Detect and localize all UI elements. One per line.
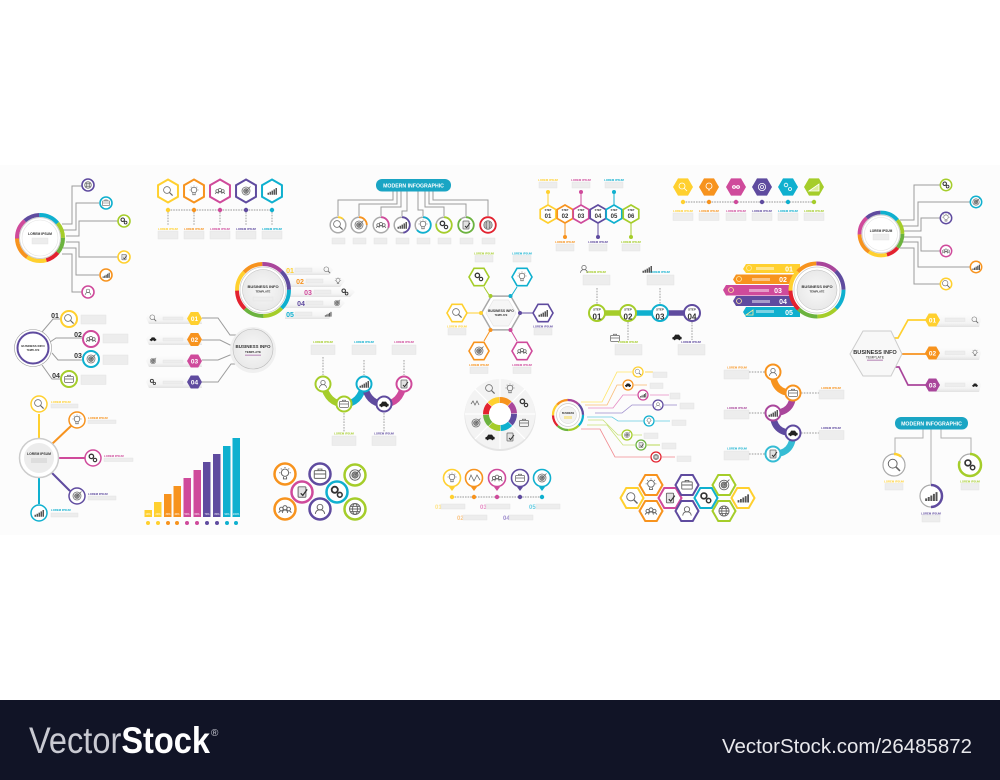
panel: business info circle with arrow tags 01-05: 05 [286,312,294,319]
panel: pin timeline five steps: 05 [529,505,536,511]
panel: business info circle with arrow tags 01-05: 02 [296,279,304,286]
panel: business info tags with hexagon numbers: 04 [191,380,198,386]
ring: business info [237,264,289,316]
panel: wave chain five nodes [311,340,416,446]
ring: lorem ipsum: LOREM IPSUM [28,232,52,236]
panel: numbered 01-04 circle left [14,311,128,387]
panel: business info tags with hexagon numbers [146,312,276,388]
panel: wave chain five nodes: LOREM IPSUM [313,340,334,344]
panel: business info circle with arrow tags 01-05: 04 [297,301,305,308]
hub circle: BUSINESS [562,412,575,415]
panel: outlined hexagon timeline: LOREM IPSUM [210,227,231,231]
panel: vertical S chain: LOREM IPSUM [727,446,748,450]
panel: step chain 01-04: STEP [656,308,664,312]
panel: filled hexagon timeline: LOREM IPSUM [699,209,720,213]
panel: radial lorem ipsum top right [860,179,982,290]
panel: hexagon radial business info: LOREM IPSUM [512,252,533,256]
panel: coloured arrow bars 01-05 with circle: 03 [774,288,782,295]
circle: business info [230,327,276,373]
panel: outlined hexagon timeline: LOREM IPSUM [184,227,205,231]
panel: hexagon steps 01-06: LOREM IPSUM [588,240,609,244]
panel: hexagon radial business info [447,252,554,374]
panel: filled hexagon timeline: LOREM IPSUM [804,209,825,213]
ring: business info: BUSINESS INFO [247,284,279,289]
panel: outlined hexagon timeline: LOREM IPSUM [158,227,179,231]
branch nodes right [940,179,982,290]
panel: step chain 01-04: LOREM IPSUM [650,270,671,274]
panel: hexagon business info with tags 01-03 right: 02 [929,350,936,358]
panel: hexagon radial business info: LOREM IPSUM [447,324,468,328]
panel: step chain 01-04: 01 [593,312,602,322]
hub circle: LOREM IPSUM [27,452,51,456]
panel: step chain 01-04: STEP [624,308,632,312]
central flat hexagon: TEMPLATE [866,356,885,360]
footer band [0,700,1000,780]
panel: modern infographic org chart [330,179,496,244]
panel: coloured arrow bars 01-05 with circle [723,262,845,318]
ring: business info small: TEMPLATE [27,349,40,352]
panel: step chain 01-04: LOREM IPSUM [681,340,702,344]
heading pill [376,179,451,192]
panel: hexagon steps 01-06: STEP [562,208,569,212]
circle: business info: BUSINESS INFO [235,344,271,349]
panel: branching circuit lines [553,367,694,462]
panel: step chain 01-04: 02 [624,312,633,322]
panel: wave chain five nodes: LOREM IPSUM [374,432,395,436]
panel: numbered 01-04 circle left: 03 [74,353,82,360]
panel: hexagon radial business info: LOREM IPSUM [469,363,490,367]
panel: step chain 01-04: LOREM IPSUM [586,270,607,274]
panel: radial five spokes lower left [20,396,133,521]
panel: modern infographic three circles: LOREM IPSUM [884,480,905,484]
panel: hexagon steps 01-06: STEP [578,208,585,212]
bar chart: 30% [165,513,171,516]
panel: business info circle with arrow tags 01-05: 01 [286,268,294,275]
panel: hexagon steps 01-06: STEP [545,208,552,212]
panel: coloured arrow bars 01-05 with circle: 04 [779,299,787,306]
panel: coloured arrow bars 01-05 with circle: 01 [785,266,793,274]
panel: hexagon steps 01-06: STEP [611,208,618,212]
panel: wave chain five nodes: LOREM IPSUM [354,340,375,344]
panel: business info tags with hexagon numbers: 01 [191,316,198,323]
circle: business info: TEMPLATE [245,350,261,354]
panel: vertical S chain: LOREM IPSUM [727,406,748,410]
panel: business info circle with arrow tags 01-05 [237,264,355,319]
panel: outlined hexagon timeline: LOREM IPSUM [236,227,257,231]
panel: radial five spokes lower left: LOREM IPSUM [51,508,71,512]
panel: filled hexagon timeline: LOREM IPSUM [673,209,694,213]
panel: hexagon steps 01-06: LOREM IPSUM [538,178,559,182]
panel: step chain 01-04: STEP [688,308,696,312]
panel: step chain 01-04 [580,265,705,355]
bar chart: 80% [214,513,220,516]
ring: business info: TEMPLATE [256,290,271,294]
central flat hexagon: BUSINESS INFO [853,350,897,356]
panel: vertical S chain: LOREM IPSUM [727,366,748,370]
panel: radial five spokes lower left: LOREM IPSUM [51,400,71,404]
panel: pin timeline five steps: 01 [435,505,442,511]
ring: business info right [789,262,845,318]
panel: radial five spokes lower left: LOREM IPSUM [104,454,124,458]
panel: hexagon business info with tags 01-03 right: 01 [929,318,936,324]
panel: hexagon business info with tags 01-03 right [850,314,981,392]
central hexagon: TEMPLATE [495,314,508,317]
ring: business info right: TEMPLATE [810,290,825,294]
panel: hexagon steps 01-06: 02 [562,214,569,220]
panel: hexagon steps 01-06: LOREM IPSUM [604,178,625,182]
bar chart: 10% [145,513,151,516]
bar chart [144,438,240,525]
panel: wave chain five nodes: LOREM IPSUM [394,340,415,344]
panel: icon circle cluster [274,464,366,520]
panel: numbered 01-04 circle left: 02 [74,332,82,339]
panel: filled hexagon timeline [673,178,825,220]
panel: eight segment pie wheel [464,379,536,451]
bar chart: 70% [204,513,210,516]
panel: hexagon radial business info: LOREM IPSUM [533,324,554,328]
progress circles [330,217,496,233]
panel: modern infographic three circles [883,417,981,522]
bar chart: 20% [155,513,161,516]
panel: wave chain five nodes: LOREM IPSUM [334,432,355,436]
panel: hexagon steps 01-06: 01 [545,214,552,220]
panel: modern infographic three circles: LOREM IPSUM [960,480,981,484]
panel: hexagon radial business info: LOREM IPSUM [512,363,533,367]
panel: filled hexagon timeline: LOREM IPSUM [778,209,799,213]
bar chart: 50% [184,513,190,516]
infographic band background [0,165,1000,535]
ring: business info small [14,330,52,366]
panel: hexagon steps 01-06: STEP [595,208,602,212]
panel: step chain 01-04: LOREM IPSUM [618,340,639,344]
coloured hub ring [486,400,514,428]
panel: vertical S chain: LOREM IPSUM [821,426,842,430]
panel: step chain 01-04: STEP [593,308,601,312]
ring: business info small: BUSINESS INFO [21,344,45,348]
panel: step chain 01-04: 03 [656,312,665,322]
panel: radial five spokes lower left: LOREM IPSUM [88,492,108,496]
hub circle [553,400,583,430]
panel: hexagon steps 01-06: STEP [628,208,635,212]
branch nodes [82,179,130,298]
panel: hexagon business info with tags 01-03 right: 03 [929,382,936,390]
panel: vertical S chain: LOREM IPSUM [821,386,842,390]
panel: hexagon radial business info: LOREM IPSUM [474,252,495,256]
panel: hexagon steps 01-06: LOREM IPSUM [555,240,576,244]
panel: pin timeline five steps [435,470,560,522]
panel: radial lorem ipsum top left [17,179,130,298]
bar chart: 100% [233,513,240,516]
footer logo: ® [211,728,219,739]
panel: vertical S chain [724,364,844,462]
bar chart: 90% [224,513,230,516]
panel: pin timeline five steps: 04 [503,516,510,522]
central hexagon [482,296,520,330]
panel: numbered 01-04 circle left: 04 [52,373,60,380]
panel: step chain 01-04: 04 [688,312,697,322]
panel: modern infographic three circles: LOREM IPSUM [921,512,942,516]
ring: lorem ipsum right: LOREM IPSUM [870,229,893,233]
panel: outlined hexagon timeline: LOREM IPSUM [262,227,283,231]
panel: numbered 01-04 circle left: 01 [51,313,59,320]
heading pill: MODERN INFOGRAPHIC [383,184,444,190]
panel: filled hexagon timeline: LOREM IPSUM [726,209,747,213]
panel: hexagon steps 01-06: 06 [628,214,635,220]
panel: outlined hexagon timeline [158,180,283,239]
panel: hexagon icon cluster [620,475,754,521]
panel: filled hexagon timeline: LOREM IPSUM [752,209,773,213]
heading pill right: MODERN INFOGRAPHIC [901,422,962,428]
panel: coloured arrow bars 01-05 with circle: 02 [779,277,787,284]
panel: coloured arrow bars 01-05 with circle: 05 [785,310,793,317]
panel: business info tags with hexagon numbers: 03 [191,358,198,366]
panel: business info tags with hexagon numbers: 02 [191,337,198,344]
footer logo: VectorStock [29,720,210,761]
bar chart: 60% [194,513,200,516]
panel: hexagon steps 01-06: LOREM IPSUM [571,178,592,182]
footer image id: VectorStock.com/26485872 [722,735,972,758]
central hexagon: BUSINESS INFO [488,309,514,313]
bar chart: 40% [174,513,180,516]
panel: hexagon steps 01-06: 04 [595,214,602,220]
panel: business info circle with arrow tags 01-05: 03 [304,290,312,297]
panel: hexagon steps 01-06: 05 [611,214,618,220]
ring: business info right: BUSINESS INFO [801,284,833,289]
panel: pin timeline five steps: 03 [480,505,487,511]
panel: hexagon steps 01-06 [538,178,642,251]
panel: pin timeline five steps: 02 [457,516,464,522]
panel: hexagon steps 01-06: LOREM IPSUM [621,240,642,244]
panel: hexagon steps 01-06: 03 [578,214,585,220]
central flat hexagon [850,331,902,376]
panel: radial five spokes lower left: LOREM IPSUM [88,416,108,420]
